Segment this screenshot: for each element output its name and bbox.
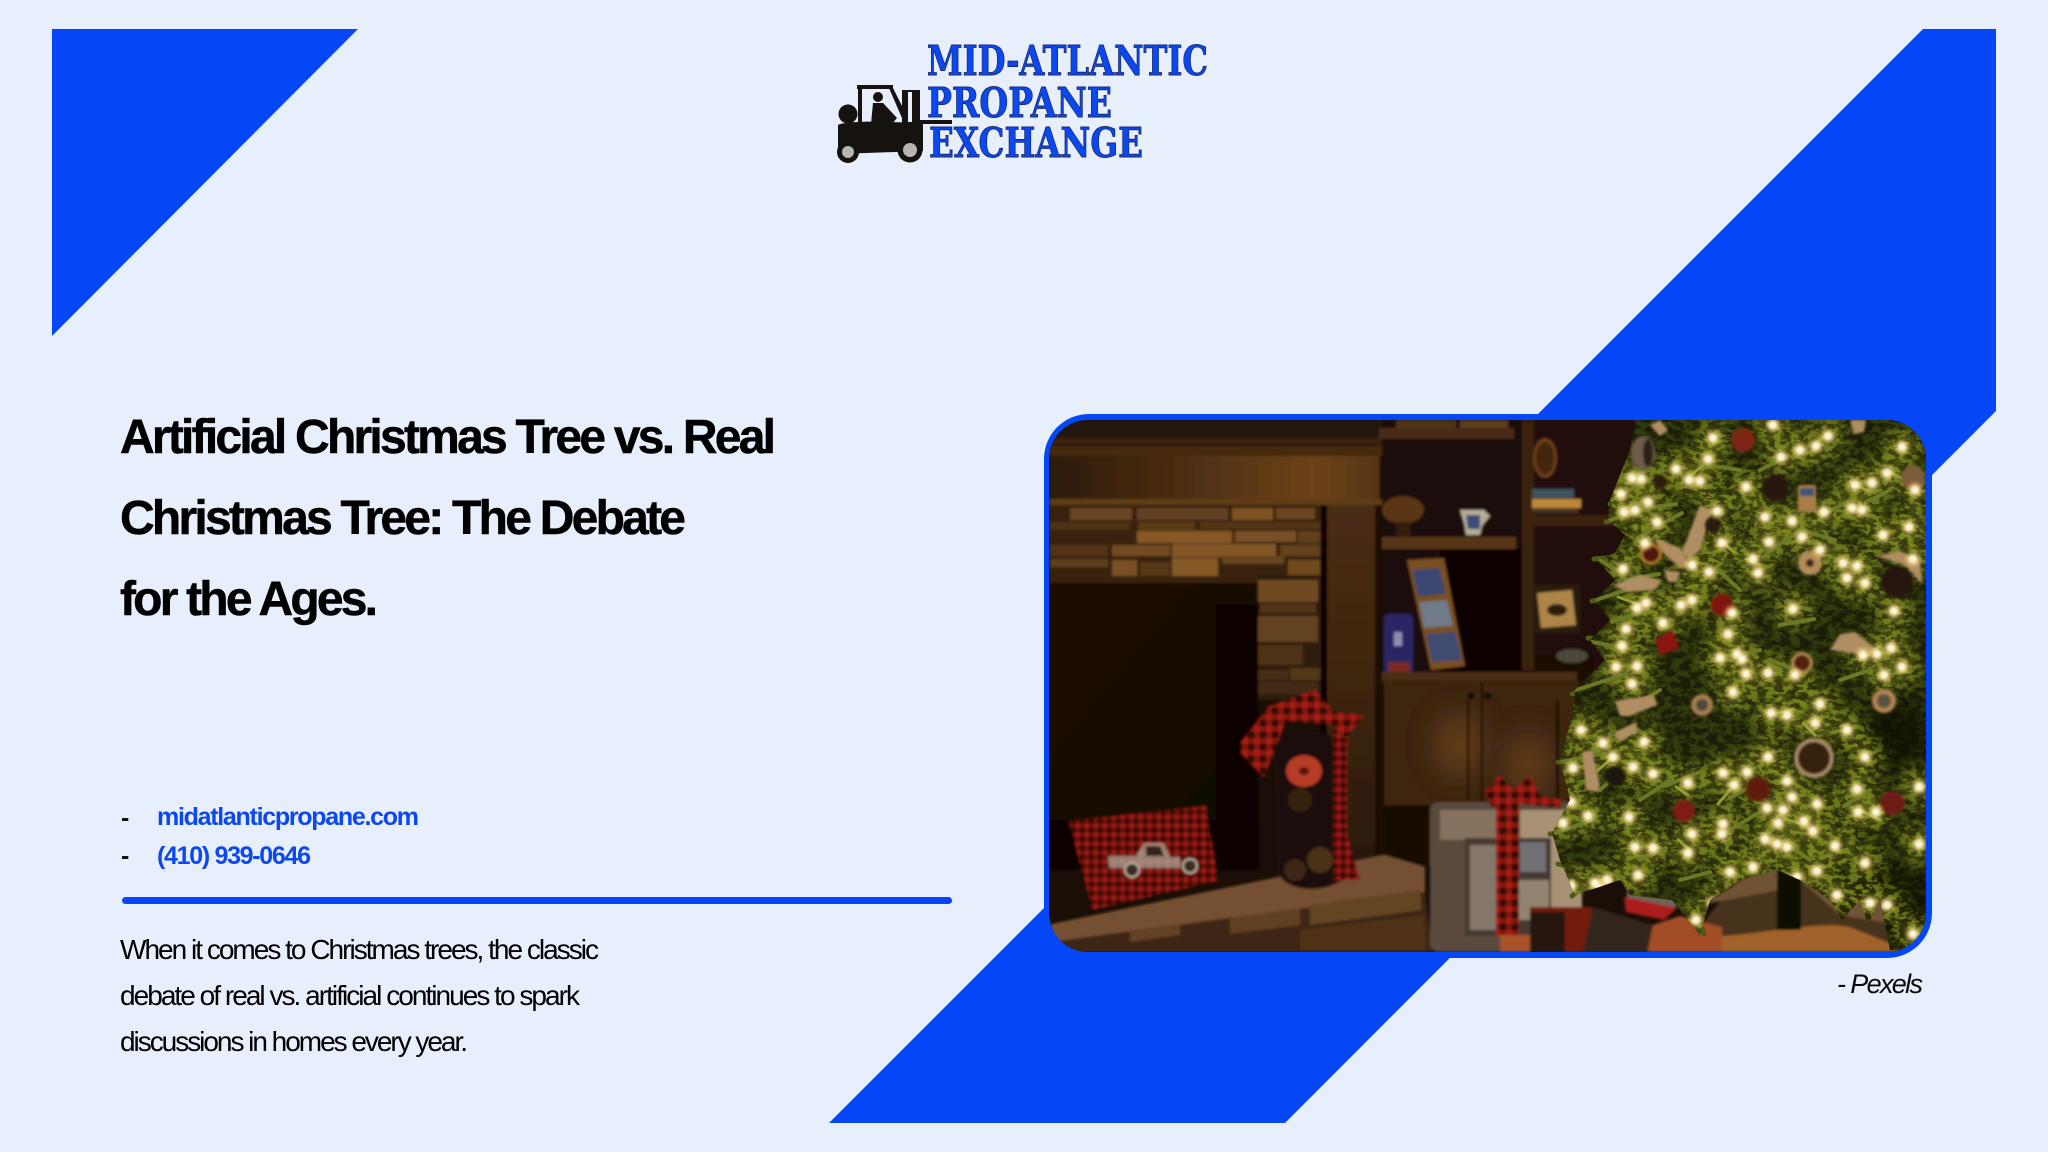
tree foliage texture [1550,420,1926,952]
vase with red plaid bow [1241,690,1364,889]
shelves [1379,420,1644,675]
cabinet [1382,672,1579,865]
contact list [121,803,419,870]
photo: Christmas tree beside a stone fireplace [1049,420,1930,956]
intro paragraph [120,934,599,1057]
contact list: midatlanticpropane.com [157,803,419,831]
logo wordmark: MID-ATLANTIC [927,37,1208,85]
contact list: (410) 939-0646 [157,842,311,870]
stone chimney [1049,505,1321,700]
title: Christmas Tree: The Debate [120,492,686,545]
framed turkey picture [1533,585,1588,663]
title: Artificial Christmas Tree vs. Real [120,411,776,464]
mantel [1049,420,1394,506]
title: for the Ages. [120,573,378,626]
hearth [1051,855,1432,952]
wrapped gift with plaid ribbon [1430,775,1582,952]
firebox [1049,576,1259,870]
fir branches [1556,456,1890,880]
floor and tree skirt [1680,868,1926,952]
logo wordmark: EXCHANGE [929,119,1143,167]
room interior, softened [1049,420,1926,952]
decorative blue diagonal band [829,29,1996,1123]
plaid pillow with truck [1069,806,1218,910]
title [120,411,776,626]
ribbon decorations [1582,420,1922,792]
logo wordmark [927,37,1208,167]
bright needles near the lights [1550,420,1926,952]
logo: Mid-Atlantic Propane Exchange [837,37,1208,167]
wood column [1321,505,1382,867]
contact list: - [121,804,129,832]
decorative blue triangle: top left [52,29,358,336]
Christmas tree [1550,420,1930,956]
string lights [1563,425,1919,934]
contact list: - [121,842,129,870]
intro paragraph: debate of real vs. artificial continues to spark [120,980,581,1011]
photo board and bottle [1384,558,1465,678]
light glow [1563,425,1919,934]
photo frame [1044,414,1932,958]
logo wordmark: PROPANE [927,79,1112,127]
icon: forklift [837,85,952,163]
divider rule [122,897,952,904]
branch tips beyond the tree outline [1550,490,1704,934]
presents at the base of the tree [1498,889,1724,952]
ornaments [1604,426,1926,824]
intro paragraph: discussions in homes every year. [120,1026,468,1057]
clock and books [1532,438,1581,513]
intro paragraph: When it comes to Christmas trees, the classic [120,934,599,965]
bowl and pitcher [1382,496,1490,537]
photo credit: - Pexels [1837,969,1923,999]
